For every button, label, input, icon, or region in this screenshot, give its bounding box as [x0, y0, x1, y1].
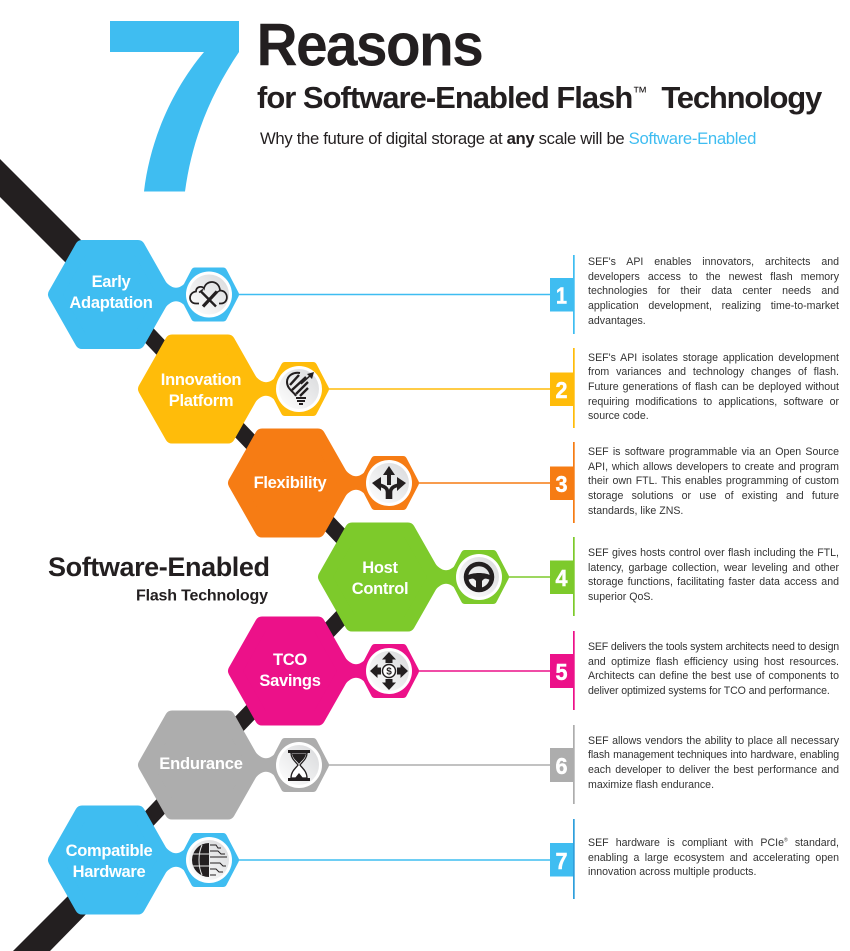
number badge 2 — [550, 348, 575, 428]
node 1: Early Adaptation: Adaptation — [69, 294, 153, 312]
text: reason 4: storage functions, facilitating faster data access and — [588, 576, 839, 588]
icon: dollar with four arrows — [370, 652, 408, 690]
text: reason 1: developers access to the newest flash memory — [588, 271, 839, 283]
text: reason 7 — [588, 837, 839, 878]
diagonal black track — [0, 159, 380, 951]
text: reason 6: SEF allows vendors the ability to place all necessary — [588, 734, 839, 746]
icon: globe with circuit lines — [192, 843, 227, 877]
number badge 4: 4 — [556, 565, 568, 591]
text: reason 4 — [588, 547, 839, 603]
node 4: Host Control — [325, 530, 505, 624]
text: reason 3: their own FTL. This enables programming of custom — [588, 475, 839, 487]
icon: steering wheel — [466, 564, 492, 590]
number badge 6 — [550, 725, 575, 804]
icon: dollar with four arrows: $ — [386, 667, 392, 678]
number badge 5 — [550, 631, 575, 710]
number badge 2: 2 — [556, 377, 568, 403]
text: reason 2: from variances and technology changes of flash. — [588, 366, 839, 378]
icon: cloud with tools — [190, 282, 227, 306]
node 4: Host Control: Host — [362, 559, 399, 577]
text: reason 5 — [588, 641, 839, 697]
text: reason 6 — [588, 734, 839, 791]
text: reason 3 — [588, 446, 839, 517]
node 1: Early Adaptation: Early — [92, 273, 132, 291]
text: reason 1: SEF's API enables innovators, architects and — [588, 256, 839, 268]
side heading: Software-Enabled Flash Technology — [48, 552, 270, 604]
text: reason 4: SEF gives hosts control over flash including the FTL, — [588, 547, 839, 559]
text: reason 1 — [588, 256, 839, 327]
text: reason 1: advantages. — [588, 315, 646, 327]
node 5: TCO Savings — [235, 624, 415, 718]
node 2: Innovation Platform: Innovation — [161, 371, 241, 389]
text: reason 1: application development, realizing time-to-market — [588, 300, 839, 312]
text: reason 5: Architects can define the best use of components to — [588, 670, 839, 682]
text: reason 7: SEF hardware is compliant with PCIe® standard, — [588, 837, 839, 849]
icon: diverging arrows — [372, 466, 406, 499]
text: reason 5: deliver optimized systems for TCO and performance. — [588, 685, 830, 697]
node 1: Early Adaptation — [55, 247, 235, 342]
number badge 6: 6 — [556, 753, 568, 779]
text: reason 5: and optimize flash efficiency using host resources. — [588, 656, 839, 668]
node 3: Flexibility — [235, 436, 415, 530]
text: reason 6: maximize flash endurance. — [588, 779, 714, 791]
node 5: TCO Savings: Savings — [259, 672, 321, 690]
connector lines — [235, 294, 552, 860]
node 5: TCO Savings: TCO — [273, 651, 307, 669]
node 2: Innovation Platform: Platform — [169, 392, 233, 410]
node 6: Endurance — [145, 718, 325, 812]
text: reason 7: innovation across multiple products. — [588, 866, 756, 878]
big number 7 — [110, 21, 239, 192]
node 7: Compatible Hardware: Compatible — [66, 842, 153, 860]
subtitle: for Software-Enabled Flash Technology: ™ — [632, 84, 646, 101]
subtitle: for Software-Enabled Flash Technology: for Software-Enabled Flash — [257, 80, 632, 115]
node 6: Endurance: Endurance — [159, 755, 243, 773]
node 3: Flexibility: Flexibility — [254, 474, 328, 492]
text: reason 5: SEF delivers the tools system architects need to design — [588, 641, 839, 653]
text: reason 4: latency, garbage collection, wear leveling and other — [588, 562, 839, 574]
side heading: Software-Enabled Flash Technology: Software-Enabled — [48, 552, 270, 582]
number badge 4 — [550, 537, 575, 616]
text: reason 6: each developer to deliver the best performance and — [588, 764, 839, 776]
node 7: Compatible Hardware — [55, 812, 235, 908]
text: reason 3: standards, like ZNS. — [588, 505, 683, 517]
number badge 7: 7 — [556, 848, 568, 874]
icon: hourglass — [288, 750, 310, 781]
text: reason 1: technologies for their data center needs and — [588, 285, 839, 297]
icon: light bulb with arrow — [287, 372, 314, 404]
text: reason 3: storage solutions or use of existing and future — [588, 490, 839, 502]
text: reason 2: requiring modifications to applications, software or — [588, 396, 839, 408]
tagline: Why the future of digital storage at any scale will be Software-Enabled — [260, 129, 756, 148]
text: reason 2: SEF's API isolates storage application development — [588, 352, 839, 364]
text: reason 7: enabling a large ecosystem and accelerating open — [588, 852, 839, 864]
text: reason 3: SEF is software programmable via an Open Source — [588, 446, 839, 458]
text: reason 6: flash management techniques into hardware, enabling — [588, 749, 839, 761]
number badge 3: 3 — [556, 471, 568, 497]
side heading: Software-Enabled Flash Technology: Flash Technology — [136, 588, 268, 604]
number badge 3 — [550, 442, 575, 523]
text: reason 3: API, which allows developers to create and program — [588, 461, 839, 473]
number badge 7 — [550, 819, 575, 899]
number badge 1: 1 — [556, 282, 567, 308]
node 2: Innovation Platform — [145, 342, 325, 436]
node 7: Compatible Hardware: Hardware — [73, 863, 146, 881]
number badge 5: 5 — [556, 659, 568, 685]
subtitle: for Software-Enabled Flash Technology: Technology — [661, 80, 823, 115]
text: reason 4: superior QoS. — [588, 591, 653, 603]
text: reason 2: source code. — [588, 410, 649, 422]
title: Reasons: Reasons — [256, 12, 482, 79]
text: reason 2 — [588, 352, 839, 422]
node 4: Host Control: Control — [352, 580, 408, 598]
number badge 1 — [550, 255, 575, 334]
text: reason 2: Future generations of flash can be deployed without — [588, 381, 839, 393]
